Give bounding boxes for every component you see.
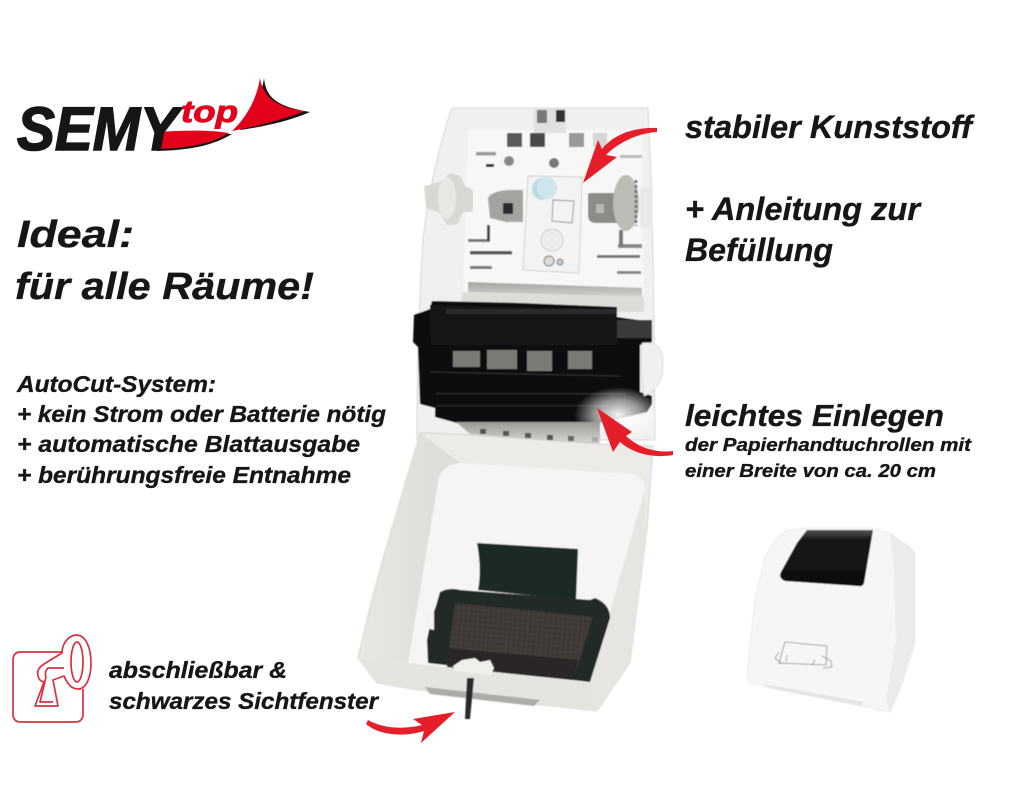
instruction sheet (523, 176, 582, 273)
arrow: plastic housing (583, 128, 657, 183)
text block: instructions: + Anleitung zur (685, 191, 922, 227)
text block: lockable and window (109, 657, 379, 714)
logo: SEMYtop: top (181, 94, 238, 129)
roll holders (424, 173, 653, 246)
heading: Ideal: für alle Räume! (15, 266, 314, 308)
text block: AutoCut-System: + berührungsfreie Entnahme (17, 462, 351, 488)
text block: lockable and window: schwarzes Sichtfenster (109, 688, 379, 714)
back panel (417, 108, 655, 440)
product photo: open dispenser (358, 108, 663, 719)
heading: Ideal (15, 214, 314, 308)
text block: AutoCut-System: + kein Strom oder Batterie nötig (17, 401, 386, 427)
text block: easy loading: der Papierhandtuchrollen mit (685, 435, 972, 455)
text block: AutoCut-System: AutoCut-System: (16, 371, 216, 397)
arrow: lock (366, 712, 455, 743)
text block: easy loading: einer Breite von ca. 20 cm (685, 461, 936, 481)
text block: stable plastic: stabiler Kunststoff (685, 109, 975, 145)
text block: instructions (685, 191, 922, 268)
product photo: closed dispenser (747, 528, 915, 712)
heading: Ideal: Ideal: (17, 214, 134, 256)
text block: AutoCut-System: + automatische Blattausgabe (17, 431, 360, 457)
open front tray (358, 433, 653, 711)
text block: instructions: Befüllung (685, 232, 833, 268)
text block: AutoCut-System (16, 371, 386, 488)
lock key (465, 678, 474, 719)
black roller assembly (413, 301, 663, 443)
logo: SEMYtop: SEMY (17, 95, 183, 163)
icon: key in lock (13, 635, 91, 722)
text block: easy loading: leichtes Einlegen (685, 398, 944, 433)
text block: easy loading (685, 398, 972, 481)
dark flap and viewing window (425, 543, 610, 682)
towel pictogram (775, 642, 832, 668)
logo: SEMYtop (17, 78, 310, 163)
arrow: easy loading (597, 408, 673, 456)
slot teeth (456, 422, 600, 444)
text block: lockable and window: abschließbar & (109, 657, 287, 683)
